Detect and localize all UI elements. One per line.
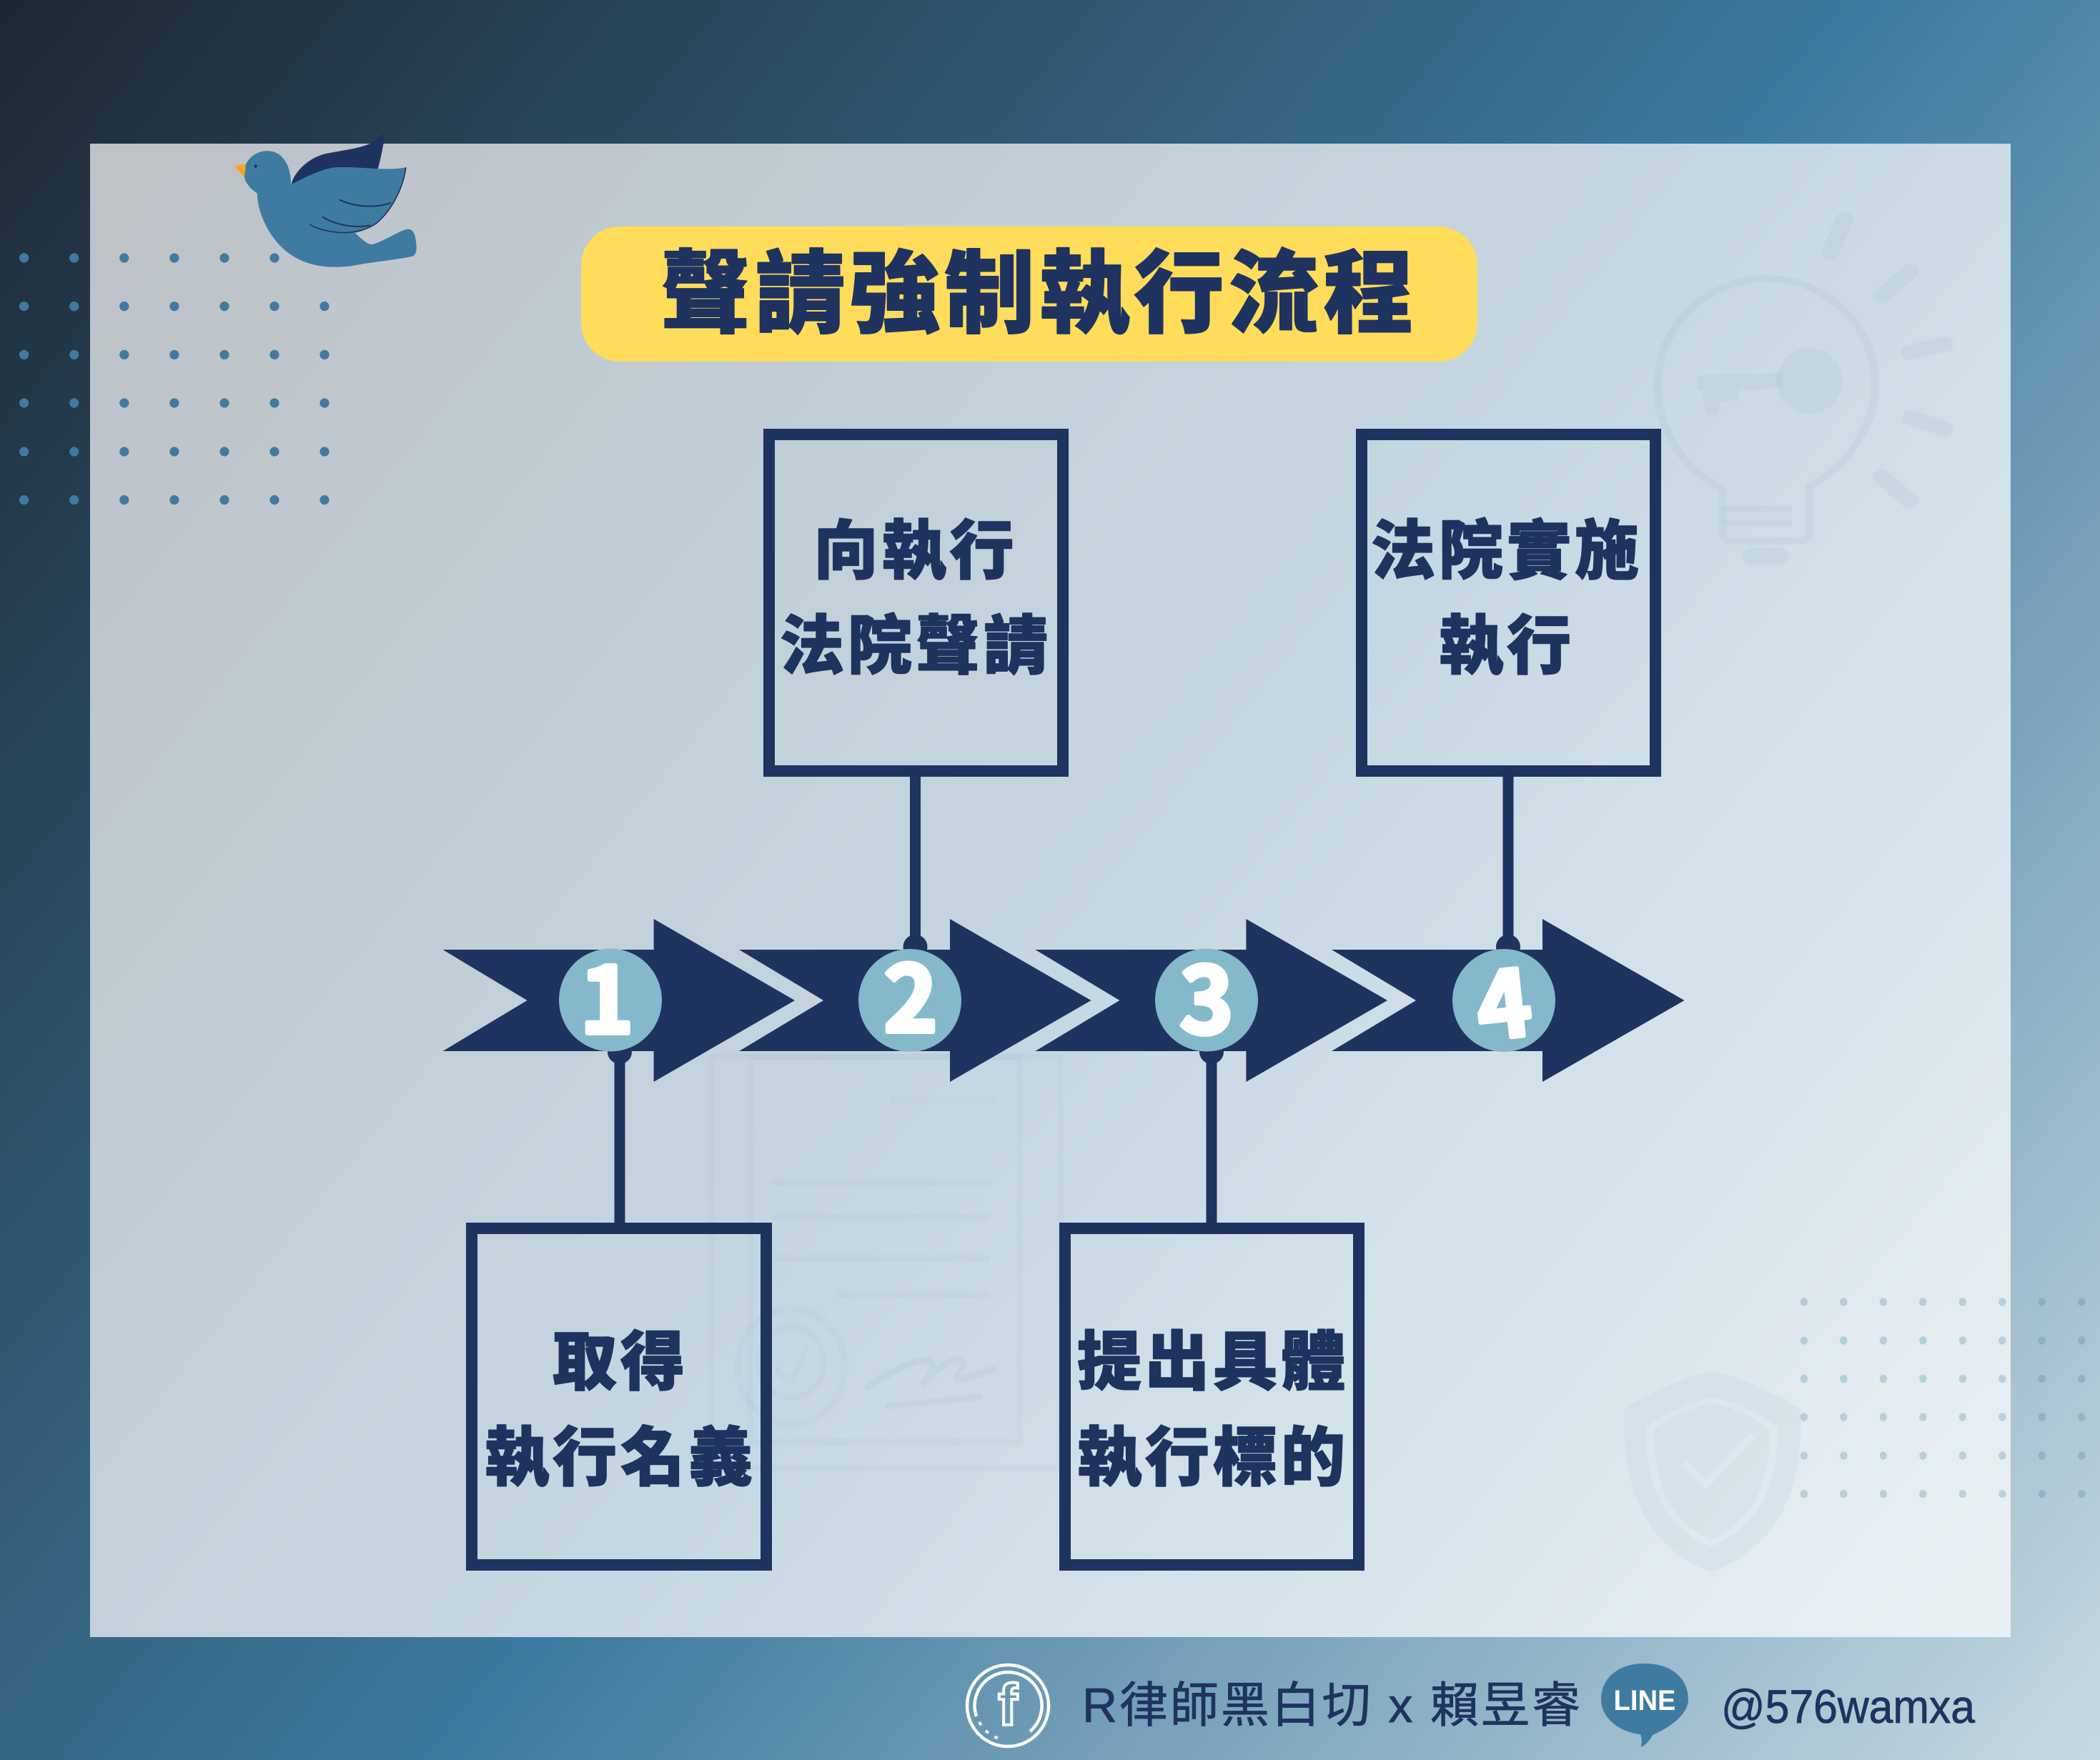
- step 4: box, connector, text: 法院實施: [1371, 516, 1643, 587]
- watermark icon: light bulb: [1658, 219, 1945, 556]
- title banner: 聲請強制執行流程: [660, 244, 1418, 344]
- watermark icon: shield with check: [1623, 1371, 1801, 1572]
- process arrows: [443, 919, 1684, 1082]
- step 1: box, connector, text: 1: [580, 928, 634, 1060]
- step 1: box, connector, text: [472, 928, 766, 1565]
- footer: LINE badge: [1601, 1664, 1688, 1747]
- title banner: [581, 227, 1477, 362]
- step 2: box, connector, text: [769, 434, 1063, 1058]
- step 2: box, connector, text: 向執行: [813, 516, 1018, 587]
- step 1: box, connector, text: 執行名義: [485, 1423, 756, 1494]
- step 2: box, connector, text: 法院聲請: [780, 611, 1051, 682]
- footer: facebook icon: f: [998, 1673, 1018, 1738]
- footer: facebook icon: [967, 1665, 1049, 1746]
- step 3: box, connector, text: 提出具體: [1077, 1327, 1349, 1398]
- footer: page name: R律師黑白切 x 賴昱睿: [1082, 1679, 1580, 1733]
- panel: main translucent card: [90, 144, 2011, 1637]
- icon: blue bird: [234, 131, 417, 267]
- dot grid: bottom right: [1801, 1298, 2086, 1498]
- step 4: box, connector, text: 4: [1470, 930, 1537, 1066]
- dot grid: top left: [19, 253, 330, 504]
- footer: LINE ID: @576wamxa: [1721, 1680, 1975, 1733]
- step 4: box, connector, text: [1362, 434, 1655, 1066]
- step 4: box, connector, text: 執行: [1439, 611, 1575, 682]
- step 3: box, connector, text: 執行標的: [1077, 1423, 1349, 1494]
- step 3: box, connector, text: 3: [1179, 928, 1234, 1060]
- step 2: box, connector, text: 2: [883, 926, 938, 1058]
- step 1: box, connector, text: 取得: [553, 1327, 688, 1398]
- step 3: box, connector, text: [1065, 928, 1359, 1565]
- watermark icon: document with stamp and signature: [712, 1057, 1061, 1468]
- footer: LINE badge: LINE: [1614, 1685, 1675, 1716]
